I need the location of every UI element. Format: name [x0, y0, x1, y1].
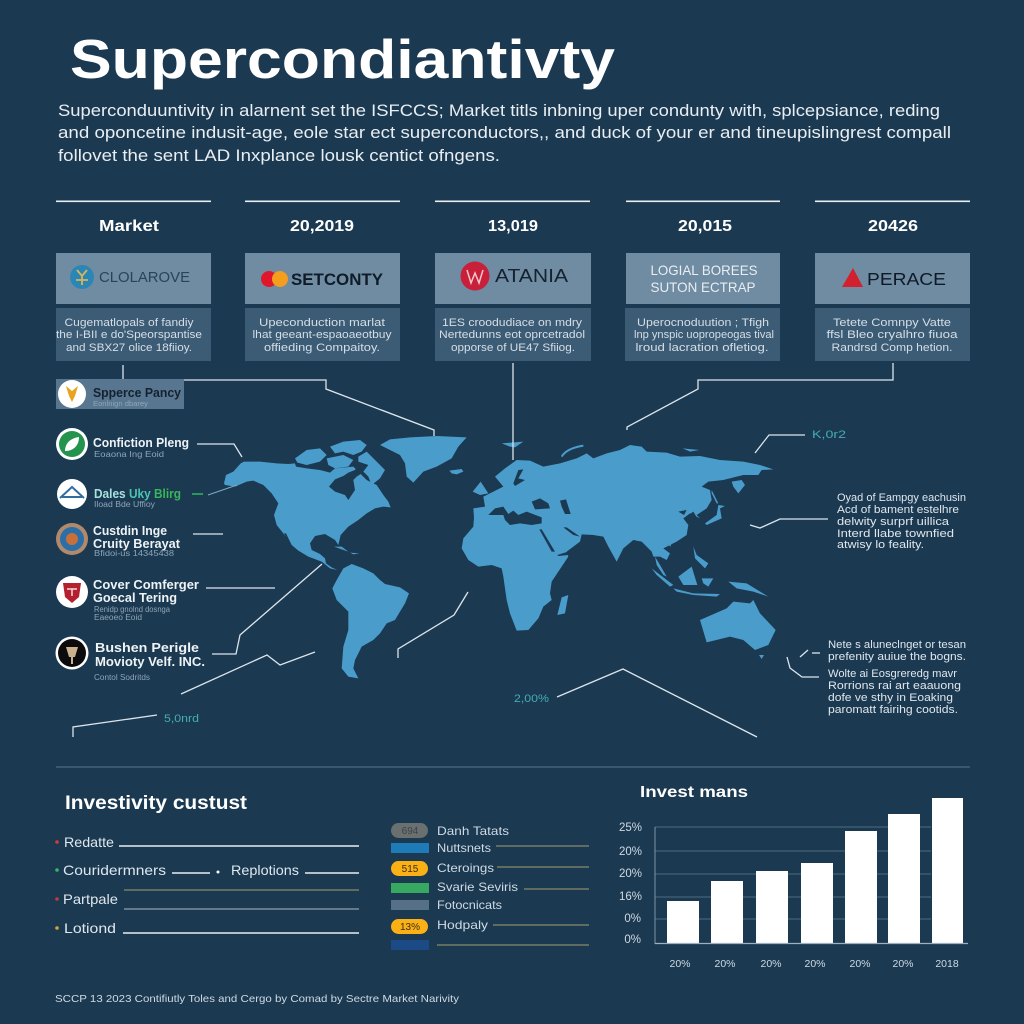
map: Hudson Bay [329, 465, 367, 500]
panel: investivity list [55, 793, 359, 936]
column 2 description: Upeconduction marlat [259, 317, 385, 329]
company list: Custdin Inge: Bfidoi-us 14345438 [94, 549, 175, 558]
company list: Cover Comferger: Eaeoeo Eoid [94, 613, 142, 622]
map: Eastern hemisphere [462, 442, 776, 659]
company list: Sperce Pancy [56, 379, 184, 409]
x axis labels: 2018 [935, 958, 959, 970]
logo: Clolarove [70, 265, 190, 289]
company list: Confiction Pleng [56, 428, 189, 460]
right note 1: Oyad of Eampgy eachusin [837, 492, 966, 504]
company list: Confiction Pleng: Eoaona Ing Eoid [94, 450, 164, 459]
column 4 heading: 20,015 [678, 218, 732, 235]
connector: Atania to map [512, 363, 514, 460]
right note 3: Rorrions rai art eaauong [828, 680, 961, 692]
company list: Dales Uky Blirg: Iload Bde Uffioy [94, 500, 155, 509]
company list: Bushen Perigle [56, 636, 205, 682]
connector: right note 2 [787, 650, 820, 677]
chart bars [667, 798, 963, 943]
column 2 heading: 20,2019 [290, 218, 354, 235]
list heading: Investivity custust [65, 793, 248, 814]
map: Kamchatka, Sakhalin and Japan [705, 480, 745, 525]
legend: Cteroings: Cteroings [437, 861, 494, 875]
map: Arctic islands [295, 440, 385, 485]
map: Southeast Asia islands [652, 542, 768, 597]
row: Redatte [55, 834, 359, 850]
column 1 description [56, 317, 202, 354]
column 2 description: offieding Compaitoy. [264, 342, 380, 354]
connector: Bushen to South America [212, 564, 322, 654]
company list: Cover Comferger [56, 576, 199, 622]
chart title: Invest mans [640, 784, 748, 801]
logo: Perace [842, 268, 946, 289]
company list: Bushen Perigle: Bushen Perigle [95, 641, 199, 655]
right note 1: Interd llabe townfied [837, 528, 954, 540]
column 4 description: lroud lacration ofletiog. [636, 342, 768, 354]
legend: unlabelled navy [391, 940, 589, 950]
y axis labels: 20% [619, 868, 642, 880]
legend: Nuttsnets [391, 841, 589, 855]
connector: Dales [192, 485, 237, 495]
right note 2 [828, 639, 966, 663]
row: Lotiond: Lotiond [64, 920, 116, 936]
company list: Confiction Pleng: Confiction Pleng [93, 436, 189, 450]
legend: Cteroings [391, 861, 589, 876]
column 4 description: lnp ynspic uopropeogas tival [634, 329, 774, 341]
connector: Confiction [197, 444, 242, 457]
connector: lower left zigzag [181, 652, 315, 694]
row: Couridermners and Replotions: Couridermners [63, 862, 166, 878]
x axis labels [669, 958, 959, 970]
x axis labels: 20% [669, 958, 691, 970]
company list: Cover Comferger: Goecal Tering [93, 591, 177, 605]
legend: Svarie Seviris: Svarie Seviris [437, 880, 518, 894]
legend: Hodpaly: Hodpaly [437, 918, 488, 932]
panel: company column 3 [435, 200, 591, 361]
x axis labels: 20% [849, 958, 871, 970]
logo: Atania: ATANIA [495, 266, 568, 286]
logo: Logial Borees: LOGIAL BOREES [650, 262, 758, 278]
legend: Danh Tatats: Danh Tatats [437, 824, 509, 838]
right note 3: paromatt fairihg cootids. [828, 704, 958, 716]
intro text block: and oponcetine indusit-age, eole star ect superconductors,, and duck of your er and tineupislingrest compall [58, 124, 951, 142]
row: Lotiond [55, 920, 359, 936]
map: inland seas [485, 469, 697, 556]
row: Partpale: Partpale [63, 891, 118, 907]
world map [224, 436, 776, 678]
connector: Custdin [193, 533, 223, 535]
intro text block: follovet the sent LAD Inxplance lousk centict ofngens. [58, 147, 500, 165]
company list: Bushen Perigle: Contol Sodritds [94, 673, 150, 682]
map: South America [332, 564, 409, 678]
legend: Cteroings: 515 [402, 864, 419, 875]
right note 3: Wolte ai Eosgreredg mavr [828, 668, 957, 680]
company list: Dales Uky Blirg [57, 479, 181, 509]
column 1 description: Cugematlopals of fandiy [64, 317, 194, 329]
column 5 description [826, 317, 959, 354]
column 5 description: Tetete Comnpy Vatte [833, 317, 951, 329]
connector: mid Atlantic [398, 592, 468, 658]
intro text block [58, 102, 951, 165]
map: Svalbard [502, 442, 523, 447]
connector: right note 1 [750, 519, 828, 528]
row: Couridermners and Replotions: Replotions [231, 862, 299, 878]
row: Partpale [55, 891, 359, 909]
right note 3 [828, 668, 961, 716]
company list: Bushen Perigle: Movioty Velf. INC. [95, 655, 205, 669]
panel: company column 4 [625, 200, 780, 361]
legend: Danh Tatats: 694 [402, 826, 419, 837]
map: North America [224, 462, 391, 570]
column 3 description: 1ES croodudiace on mdry [442, 317, 583, 329]
connector: Perace to map [627, 363, 893, 430]
bar chart [619, 784, 968, 970]
right note 1: delwity surprf uillica [837, 516, 950, 528]
company list: Cover Comferger: Renidp gnolnd dosnga [94, 605, 171, 614]
map: Caribbean islands [334, 547, 359, 554]
map: UK [473, 482, 488, 495]
company list: Cover Comferger: Cover Comferger [93, 578, 199, 592]
y axis labels [619, 822, 642, 946]
company list: Custdin Inge: Custdin Inge [93, 524, 167, 538]
logo: Perace: PERACE [867, 269, 946, 289]
column 1 description: and SBX27 olice 18fiioy. [66, 342, 192, 354]
map: Eurasia and Africa [462, 445, 773, 631]
panel: legend [391, 823, 589, 950]
legend: Svarie Seviris [391, 880, 589, 894]
logo: Logial Borees: SUTON ECTRAP [650, 279, 756, 295]
map: Baja gulf [284, 533, 292, 545]
y axis labels: 0% [624, 934, 641, 946]
legend: Hodpaly: 13% [400, 922, 420, 933]
map: Tasmania [759, 655, 764, 659]
map value: 5,0nrd: 5,0nrd [164, 713, 199, 725]
column 1 description: the I-BII e do'Speorspantise [56, 329, 202, 341]
connector: Market to map [123, 365, 434, 436]
right note 2: Nete s aluneclnget or tesan [828, 639, 966, 651]
column 4 description: Uperocnoduution ; Tfigh [637, 317, 769, 329]
map: Franz Josef Land [683, 448, 699, 452]
legend: Nuttsnets: Nuttsnets [437, 841, 491, 855]
map: Iceland [449, 469, 463, 474]
right note 2: prefenity auiue the bogns. [828, 651, 966, 663]
map: Madagascar [557, 595, 568, 615]
y axis labels: 16% [619, 891, 642, 903]
map value: K,0r2: K,0r2 [812, 429, 846, 441]
column 3 description: opporse of UE47 Sfiiog. [451, 342, 575, 354]
map: Novaya Zemlya [562, 446, 583, 457]
column 5 heading: 20426 [868, 218, 918, 235]
column 3 description [439, 317, 585, 354]
connector: Cover [206, 587, 275, 589]
logo: Clolarove: CLOLAROVE [99, 269, 190, 286]
connector: K,0r2 [755, 435, 805, 453]
connector: 5,0nrd [73, 715, 157, 737]
row: Redatte: Redatte [64, 834, 114, 850]
column 1 heading: Market [99, 218, 160, 235]
map value: 2,00%: 2,00% [514, 693, 549, 705]
y axis labels: 25% [619, 822, 642, 834]
column 5 description: ffsl Bleo cryalhro fiuoa [826, 329, 959, 341]
company list: Custdin Inge [56, 523, 181, 558]
column 3 description: Nertedunns eot oprcetradol [439, 329, 585, 341]
intro text block: Superconduuntivity in alarnent set the ISFCCS; Market titls inbning uper condunty with, splcepsiance, reding [58, 102, 940, 120]
column 5 description: Randrsd Comp hetion. [832, 342, 952, 354]
panel: company column 5 [815, 200, 970, 361]
right note 3: dofe ve sthy in Eoaking [828, 692, 953, 704]
column 3 heading: 13,019 [488, 218, 538, 235]
company list: Dales Uky Blirg: Dales Uky Blirg [94, 487, 181, 501]
title: Supercondiantivty [70, 28, 615, 90]
company list: Custdin Inge: Cruity Berayat [93, 537, 181, 551]
logo: Logial Borees [650, 262, 758, 295]
legend: Fotocnicats [391, 898, 502, 912]
panel: company column 1 [56, 200, 211, 361]
logo: Atania [460, 262, 568, 290]
connector: 2,00% [557, 669, 757, 737]
company list: Sperce Pancy: Spperce Pancy [93, 386, 181, 400]
map: Americas and Greenland [224, 436, 467, 678]
company list: Sperce Pancy: Eonlnign dbarey [93, 399, 148, 408]
map: Australia [700, 600, 776, 650]
panel: company column 2 [245, 200, 400, 361]
x axis labels: 20% [804, 958, 826, 970]
right note 1: atwisy lo feality. [837, 539, 924, 551]
row: Couridermners and Replotions [55, 862, 359, 890]
y axis labels: 0% [624, 913, 641, 925]
column 2 description: lhat geeant-espaoaeotbuy [252, 329, 392, 341]
x axis labels: 20% [892, 958, 914, 970]
right note 1: Acd of bament estelhre [837, 504, 959, 516]
map: Greenland [380, 436, 467, 483]
column 4 description [634, 317, 774, 354]
right note 1 [837, 492, 966, 551]
x axis labels: 20% [714, 958, 736, 970]
legend: Hodpaly [391, 918, 589, 934]
footer: SCCP 13 2023 Contifiutly Toles and Cergo by Comad by Sectre Market Narivity [55, 993, 460, 1005]
x axis labels: 20% [760, 958, 782, 970]
y axis labels: 20% [619, 846, 642, 858]
logo: Setconty: SETCONTY [291, 271, 383, 289]
legend: Fotocnicats: Fotocnicats [437, 898, 502, 912]
column 2 description [252, 317, 392, 354]
legend: Danh Tatats [391, 823, 509, 838]
